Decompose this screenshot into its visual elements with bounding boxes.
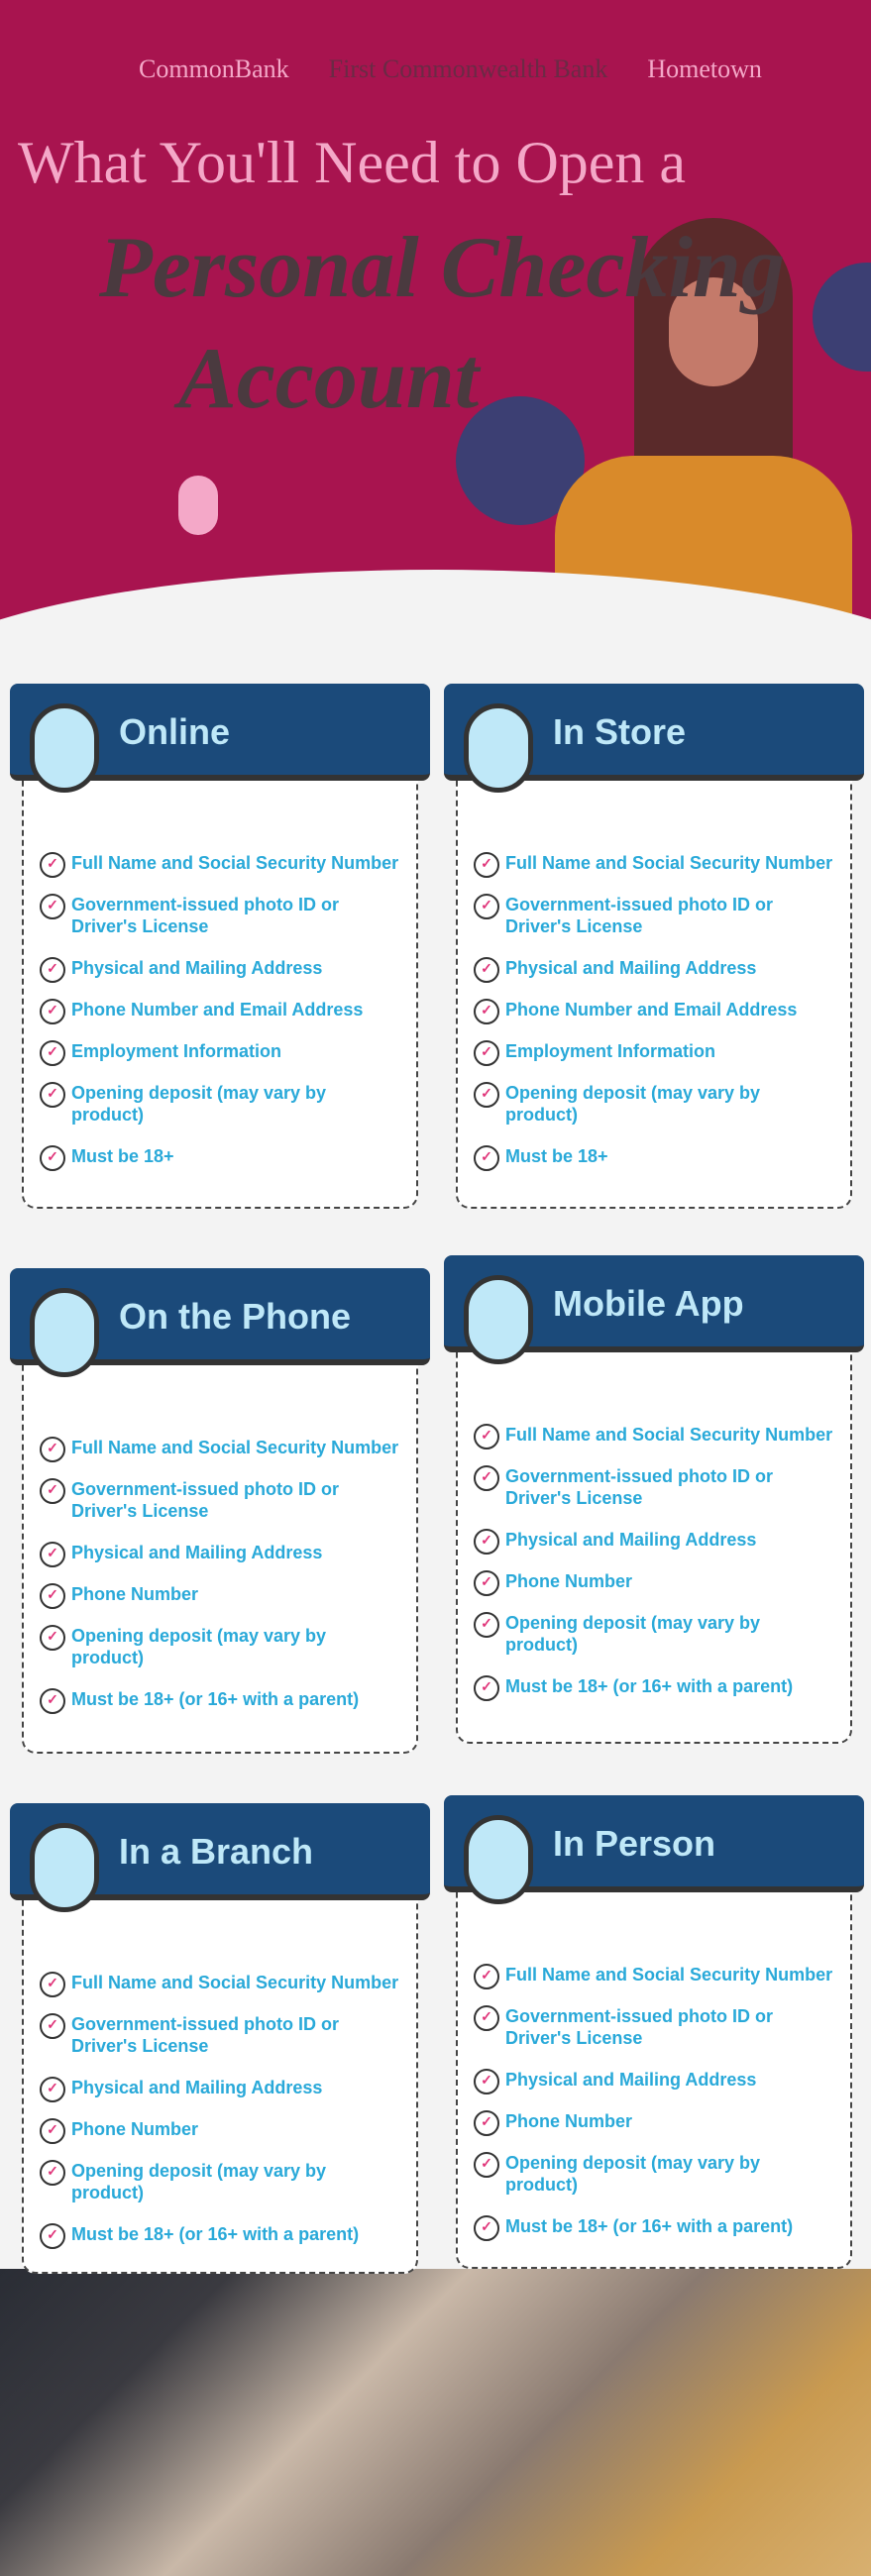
panel header: branch [10, 1803, 430, 1900]
list: in store requirements: Employment Information [505, 1041, 715, 1061]
list: phone requirements: Must be 18+ (or 16+ with a parent) [71, 1689, 359, 1709]
list: phone requirements: Phone Number [71, 1584, 198, 1604]
list: mobile requirements: Full Name and Social Security Number [505, 1425, 832, 1445]
list: in person requirements: Must be 18+ (or 16+ with a parent) [505, 2216, 793, 2236]
list: in store requirements: Phone Number and Email Address [505, 1000, 797, 1020]
list: branch requirements [40, 1972, 398, 2249]
list: mobile requirements: Physical and Mailing Address [505, 1530, 756, 1550]
panel header: phone [10, 1268, 430, 1365]
photo: laptop hands [0, 2269, 871, 2576]
list: branch requirements: Government-issued photo ID or Driver's License [71, 2014, 339, 2056]
list: mobile requirements: Phone Number [505, 1571, 632, 1591]
list: online requirements: Full Name and Social Security Number [71, 853, 398, 873]
panel header: mobile [444, 1255, 864, 1352]
list: branch requirements: Opening deposit (may vary by product) [71, 2161, 326, 2202]
panel header: in person [444, 1795, 864, 1892]
list: mobile requirements: Government-issued photo ID or Driver's License [505, 1466, 773, 1508]
list: in person requirements: Physical and Mailing Address [505, 2070, 756, 2090]
list: online requirements: Employment Information [71, 1041, 281, 1061]
panel: on the phone [22, 1278, 418, 1754]
list: online requirements [40, 852, 398, 1171]
list: online requirements: Physical and Mailing Address [71, 958, 322, 978]
list: phone requirements [40, 1437, 398, 1714]
panel header: phone: On the Phone [119, 1296, 351, 1337]
panel: online [22, 694, 418, 1209]
panel: mobile app [456, 1265, 852, 1744]
title: What You'll Need to Open a [18, 130, 686, 195]
list: online requirements: Phone Number and Email Address [71, 1000, 363, 1020]
list: online requirements: Government-issued photo ID or Driver's License [71, 895, 339, 936]
list: in store requirements: Physical and Mailing Address [505, 958, 756, 978]
list: online requirements: Must be 18+ [71, 1146, 174, 1166]
panel: in person [456, 1805, 852, 2269]
list: in store requirements: Full Name and Social Security Number [505, 853, 832, 873]
script subtitle: Account [178, 331, 479, 427]
list: phone requirements: Government-issued photo ID or Driver's License [71, 1479, 339, 1521]
list: branch requirements: Phone Number [71, 2119, 198, 2139]
logos: First Commonwealth Bank [329, 54, 607, 83]
list: phone requirements: Full Name and Social Security Number [71, 1438, 398, 1457]
list: mobile requirements: Must be 18+ (or 16+ with a parent) [505, 1676, 793, 1696]
panel header: online: Online [119, 711, 230, 752]
hero header [0, 0, 871, 634]
script subtitle: Personal Checking [99, 220, 785, 316]
logos: CommonBank [139, 54, 289, 83]
list: in person requirements [474, 1964, 832, 2241]
list: branch requirements: Must be 18+ (or 16+ with a parent) [71, 2224, 359, 2244]
photo: woman [555, 218, 852, 614]
list: in store requirements [474, 852, 832, 1171]
panel header: in store [444, 684, 864, 781]
decorative circles [456, 396, 585, 525]
panel header: online [10, 684, 430, 781]
logos: Hometown [647, 54, 762, 83]
list: in person requirements: Opening deposit (may vary by product) [505, 2153, 760, 2195]
list: mobile requirements: Opening deposit (may vary by product) [505, 1613, 760, 1655]
panel header: branch: In a Branch [119, 1831, 313, 1872]
panel header: in person: In Person [553, 1823, 715, 1864]
list: in store requirements: Must be 18+ [505, 1146, 608, 1166]
list: in person requirements: Phone Number [505, 2111, 632, 2131]
list: in person requirements: Government-issued photo ID or Driver's License [505, 2006, 773, 2048]
list: phone requirements: Physical and Mailing Address [71, 1543, 322, 1562]
panel: in store [456, 694, 852, 1209]
list: online requirements: Opening deposit (may vary by product) [71, 1083, 326, 1125]
list: mobile requirements [474, 1424, 832, 1701]
list: phone requirements: Opening deposit (may vary by product) [71, 1626, 326, 1667]
logos [139, 54, 762, 83]
list: branch requirements: Physical and Mailing Address [71, 2078, 322, 2097]
list: branch requirements: Full Name and Social Security Number [71, 1973, 398, 1992]
panel header: mobile: Mobile App [553, 1283, 744, 1324]
panel: in a branch [22, 1813, 418, 2274]
list: in store requirements: Opening deposit (may vary by product) [505, 1083, 760, 1125]
list: in person requirements: Full Name and Social Security Number [505, 1965, 832, 1985]
list: in store requirements: Government-issued photo ID or Driver's License [505, 895, 773, 936]
panel header: in store: In Store [553, 711, 686, 752]
script subtitle [99, 220, 785, 427]
